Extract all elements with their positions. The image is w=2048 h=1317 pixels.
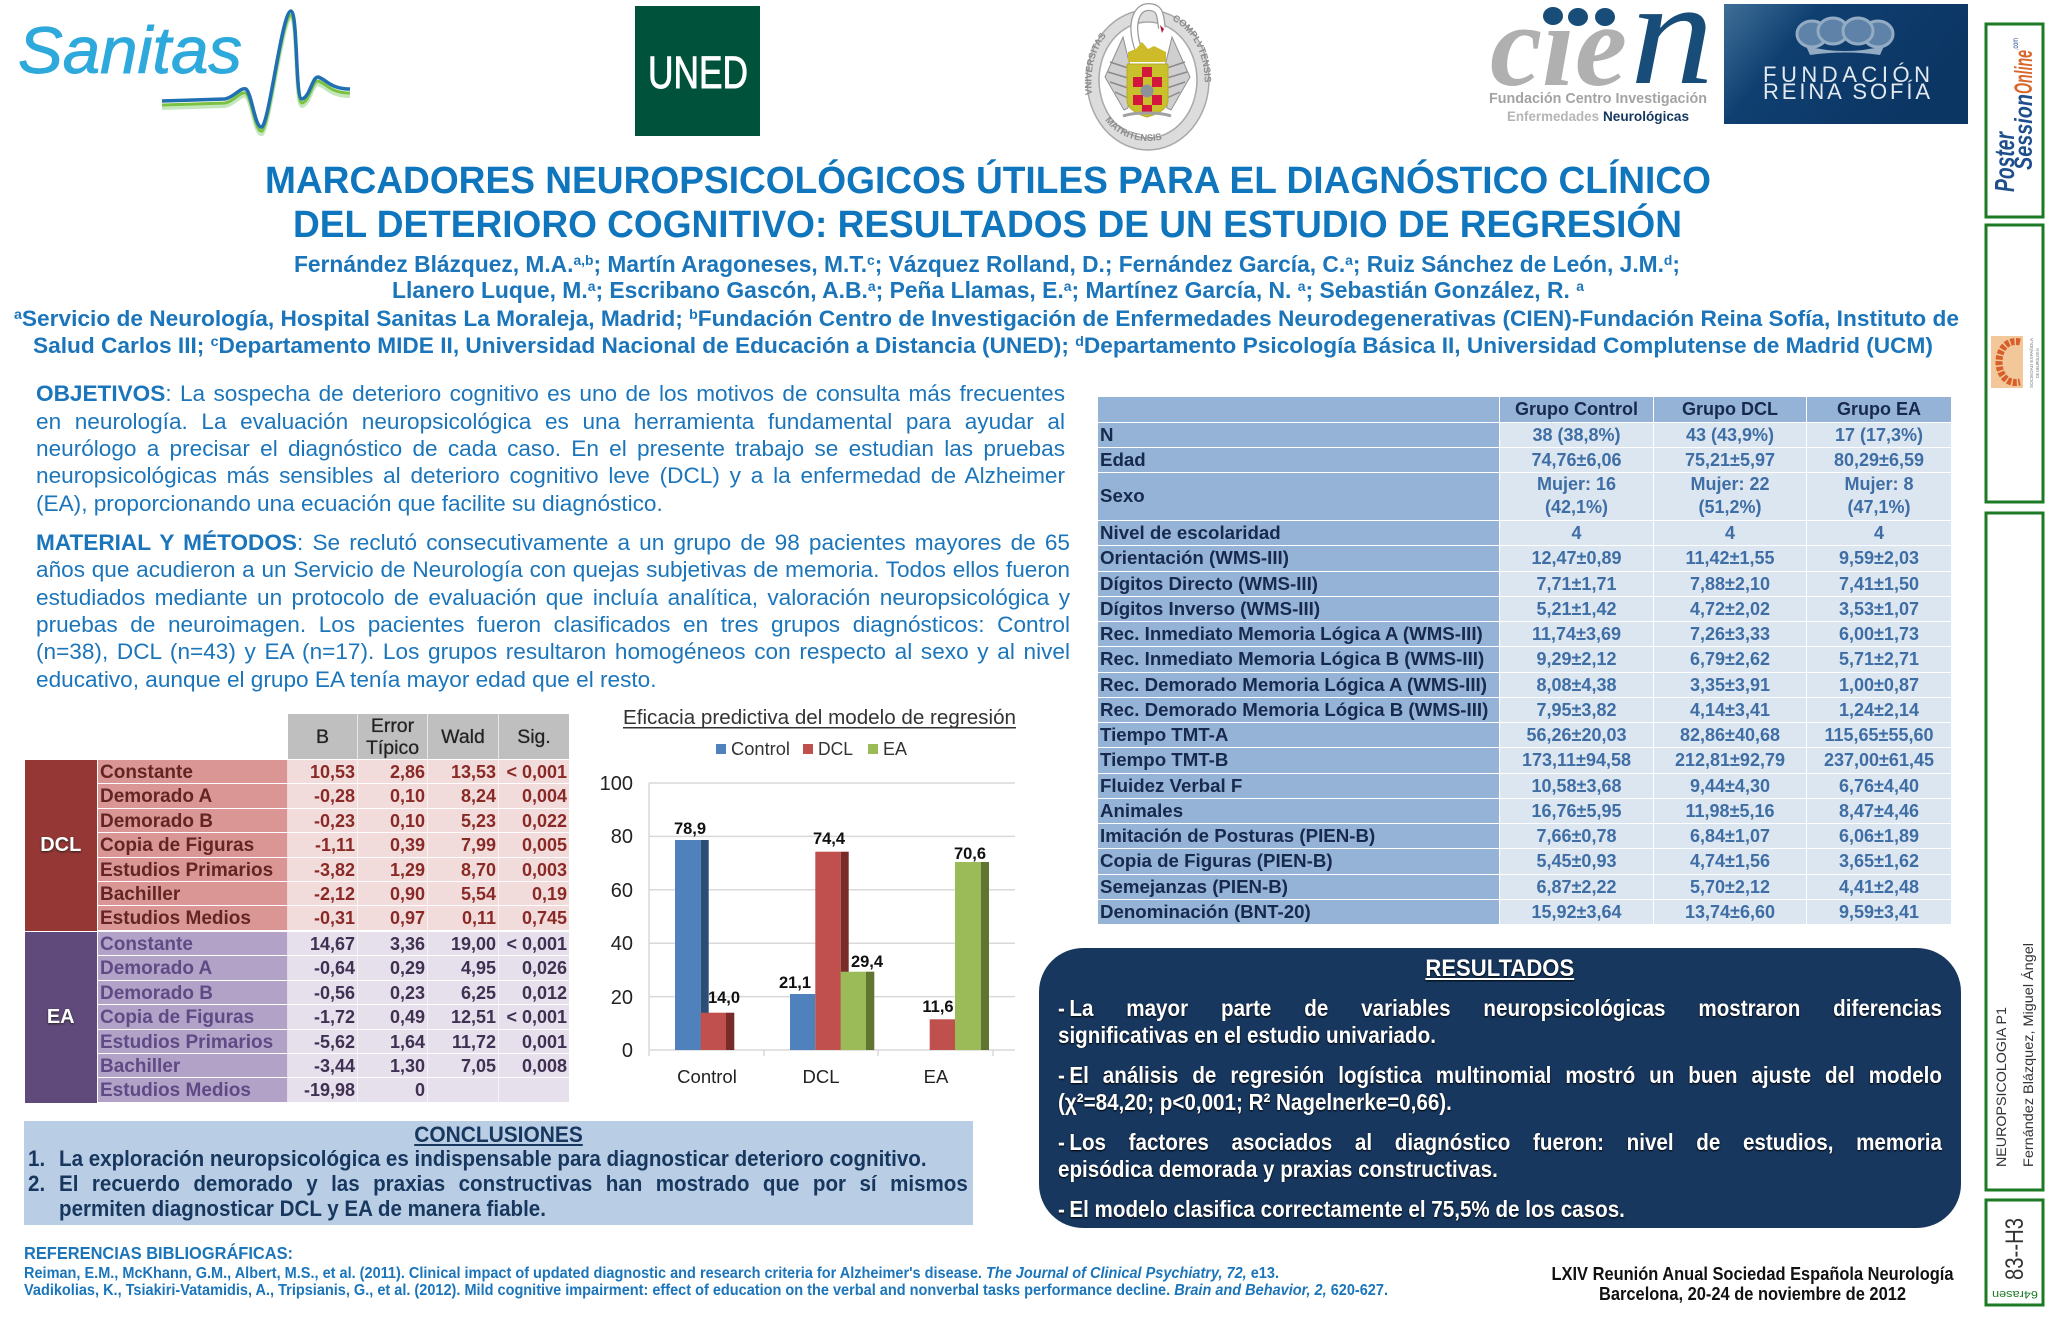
table: group descriptives: 7,88±2,10 <box>1690 574 1770 594</box>
table: group descriptives: 82,86±40,68 <box>1680 725 1780 745</box>
table header <box>288 714 569 759</box>
sidebar: poster area and author: Fernández Blázquez, Miguel Ángel <box>2020 943 2036 1167</box>
panel: objetivos: neuropsicológicas más sensibles al deterioro cognitivo leve (DCL) y a la enfermedad de Alzheimer <box>36 463 1065 488</box>
table: group descriptives: 6,84±1,07 <box>1690 826 1770 846</box>
authors: a <box>588 278 596 294</box>
table: group descriptives: 43 (43,9%) <box>1686 425 1774 445</box>
table: group descriptives: 6,06±1,89 <box>1839 826 1919 846</box>
group: EA rows: Constante <box>100 934 193 955</box>
panel: objetivos: neurólogo a precisar el diagnóstico de cada caso. En el presente trabajo se estudian las pruebas <box>36 436 1065 461</box>
table: group descriptives: 56,26±20,03 <box>1527 725 1626 745</box>
table: group descriptives: (42,1%) <box>1545 497 1608 517</box>
sidebar: Sociedad Española de Neurología logo: SOCIEDAD ESPAÑOLA <box>2028 338 2034 388</box>
chart legend <box>716 739 907 759</box>
group: EA rows: 0,23 <box>390 983 425 1003</box>
table: group descriptives: 173,11±94,58 <box>1522 750 1631 770</box>
group: DCL rows: < 0,001 <box>506 762 567 782</box>
table: group descriptives: 7,66±0,78 <box>1537 826 1616 846</box>
table: group descriptives: 115,65±55,60 <box>1824 725 1933 745</box>
group: DCL rows: 0,11 <box>462 908 496 928</box>
table: group descriptives: 38 (38,8%) <box>1532 425 1621 445</box>
group: DCL rows: 0,90 <box>390 884 425 904</box>
group: DCL rows: 8,24 <box>461 786 496 806</box>
group: DCL rows: 5,23 <box>461 811 496 831</box>
bar chart: predictive efficacy <box>600 707 1016 1087</box>
y axis labels: 0 <box>622 1040 633 1062</box>
group: DCL rows: Copia de Figuras <box>100 835 254 856</box>
logo: Fundación Reina Sofía: FUNDACIÓN <box>1763 62 1930 87</box>
logo: UNED <box>635 6 760 136</box>
references <box>24 1242 1388 1299</box>
table: group descriptives: 7,71±1,71 <box>1537 574 1616 594</box>
affiliations: Fundación Centro de Investigación de Enfermedades Neurodegenerativas (CIEN)-Fundación Reina Sofía, Instituto de <box>698 306 1959 331</box>
sidebar: PosterSessionOnline logo <box>1986 24 2043 217</box>
table: group descriptives: 3,65±1,62 <box>1839 851 1919 871</box>
table: group descriptives <box>1098 397 1951 924</box>
group: EA rows: Estudios Primarios <box>100 1032 273 1053</box>
affiliations <box>14 306 1959 358</box>
table: group descriptives: 4 <box>1725 523 1735 543</box>
y axis labels: 20 <box>611 987 633 1009</box>
group: DCL rows: 0,97 <box>390 908 425 928</box>
table: group descriptives: Nivel de escolaridad <box>1100 522 1281 543</box>
authors: ; Sebastián González, R. <box>1306 277 1576 303</box>
table: group descriptives: 4,41±2,48 <box>1839 877 1919 897</box>
authors <box>294 251 1680 303</box>
panel: resultados: -El análisis de regresión logística multinomial mostró un buen ajuste del modelo <box>1058 1062 1942 1088</box>
title <box>265 158 1711 246</box>
y axis labels: 100 <box>600 773 633 795</box>
panel: material y métodos: años que acudieron a un Servicio de Neurología con quejas subjetivas de memoria. Todos ellos fueron <box>36 557 1070 582</box>
group: DCL rows: 1,29 <box>390 860 425 880</box>
logo: Universidad Complutense seal <box>1084 3 1212 151</box>
authors: a <box>1298 278 1306 294</box>
y axis labels: 80 <box>611 826 633 848</box>
table: group descriptives: 237,00±61,45 <box>1824 750 1934 770</box>
group: EA rows: EA <box>47 1006 75 1028</box>
bars: EA group <box>930 862 989 1050</box>
authors: ; Escribano Gascón, A.B. <box>595 277 868 303</box>
authors: ; Martínez García, N. <box>1072 277 1298 303</box>
chart legend: DCL <box>818 739 853 759</box>
group: DCL rows: Estudios Primarios <box>100 860 273 881</box>
data labels: 74,4 <box>813 830 846 848</box>
table: group descriptives: 7,95±3,82 <box>1537 700 1616 720</box>
table: group descriptives: 5,70±2,12 <box>1690 877 1770 897</box>
sidebar: PosterSessionOnline logo: Online <box>2010 50 2038 94</box>
table: group descriptives: Dígitos Inverso (WMS-III) <box>1100 598 1320 619</box>
authors: a <box>1576 278 1584 294</box>
group: DCL rows: -0,31 <box>314 908 355 928</box>
table: group descriptives: 4,14±3,41 <box>1690 700 1770 720</box>
table: group descriptives: Sexo <box>1100 485 1145 506</box>
table: group descriptives: 80,29±6,59 <box>1834 450 1924 470</box>
group: DCL rows: -2,12 <box>314 884 355 904</box>
logo: Sanitas <box>18 11 350 134</box>
table: group descriptives: 4,72±2,02 <box>1690 599 1770 619</box>
table: group descriptives: 3,53±1,07 <box>1839 599 1919 619</box>
group: DCL rows: 13,53 <box>451 762 496 782</box>
group: EA rows: Demorado A <box>100 958 212 979</box>
authors: Fernández Blázquez, M.A. <box>294 251 576 277</box>
group: EA rows: 0,29 <box>390 958 425 978</box>
references: REFERENCIAS BIBLIOGRÁFICAS: <box>24 1242 293 1263</box>
group: DCL rows: 0,003 <box>522 860 567 880</box>
authors: d <box>1664 252 1672 268</box>
logo: UNED: UNED <box>648 47 748 98</box>
table header <box>1098 397 1951 423</box>
group: EA rows: 14,67 <box>310 934 355 954</box>
group: EA rows: < 0,001 <box>506 1007 567 1027</box>
table: group descriptives: 11,98±5,16 <box>1686 801 1774 821</box>
table: group descriptives: 9,44±4,30 <box>1690 776 1770 796</box>
table: group descriptives: 15,92±3,64 <box>1532 902 1621 922</box>
chart legend: EA <box>883 739 907 759</box>
group: EA rows: Estudios Medios <box>100 1080 251 1101</box>
logo: Universidad Complutense seal: COMPLVTENSIS <box>1174 15 1212 82</box>
congress note: Barcelona, 20-24 de noviembre de 2012 <box>1599 1284 1906 1304</box>
y axis labels <box>600 773 633 1062</box>
y axis labels: 40 <box>611 933 633 955</box>
panel: conclusiones: El recuerdo demorado y las praxias constructivas han mostrado que por sí mismos <box>59 1171 968 1196</box>
title: DEL DETERIORO COGNITIVO: RESULTADOS DE UN ESTUDIO DE REGRESIÓN <box>293 202 1682 246</box>
group: DCL rows: 0,005 <box>522 835 567 855</box>
group: DCL rows: -0,28 <box>314 786 355 806</box>
authors: a <box>1064 278 1072 294</box>
references: Vadikolias, K., Tsiakiri-Vatamidis, A., Tripsianis, G., et al. (2012). Mild cognitive impairment: effect of education on the verbal and nonverbal tasks performance decline. Brain and Behavior, 2, 620-627. <box>24 1282 1388 1299</box>
logo: CIEN: Neurológicas <box>1603 108 1689 124</box>
panel: objetivos <box>36 381 1065 516</box>
logo: CIEN: Enfermedades <box>1507 108 1599 124</box>
group: EA rows: 1,64 <box>390 1032 425 1052</box>
bars: DCL group <box>790 852 874 1050</box>
logo: Universidad Complutense seal: MATRITENSIS <box>1105 116 1162 141</box>
panel: objetivos: en neurología. La evaluación neuropsicológica es una herramienta fundamental para ayudar al <box>36 409 1065 434</box>
group: DCL rows: DCL <box>40 834 81 856</box>
data labels <box>674 820 986 1016</box>
affiliations: Salud Carlos III; <box>33 333 203 358</box>
table: group descriptives: 212,81±92,79 <box>1675 750 1785 770</box>
table: group descriptives: 4 <box>1571 523 1582 543</box>
table: group descriptives: 13,74±6,60 <box>1685 902 1775 922</box>
table header: Sig. <box>517 726 551 748</box>
panel: resultados: significativas en el estudio univariado. <box>1058 1022 1436 1048</box>
group: DCL rows: -3,82 <box>314 860 355 880</box>
group: DCL rows: Bachiller <box>100 884 180 905</box>
panel: material y métodos: educativo, aunque el grupo EA tenía mayor edad que el resto. <box>36 667 657 692</box>
data labels: 11,6 <box>922 998 954 1016</box>
authors: ; Vázquez Rolland, D.; Fernández García, C. <box>875 251 1345 277</box>
table: group descriptives: 16,76±5,95 <box>1532 801 1621 821</box>
affiliations: Servicio de Neurología, Hospital Sanitas La Moraleja, Madrid; <box>22 306 689 331</box>
affiliations: a <box>14 306 22 322</box>
table: group descriptives: 1,24±2,14 <box>1839 700 1919 720</box>
table header: B <box>316 726 329 748</box>
table: group descriptives: 12,47±0,89 <box>1532 548 1621 568</box>
chart legend: Control <box>731 739 790 759</box>
group: DCL rows: 10,53 <box>310 762 355 782</box>
panel: material y métodos: estudiados mediante un protocolo de evaluación que incluía analítica, valoración neuropsicológica y <box>36 585 1070 610</box>
bars: Control group <box>675 840 734 1050</box>
sidebar: poster code: 83--H3 <box>2001 1218 2029 1280</box>
group: DCL rows <box>25 760 569 931</box>
group: DCL rows: 0,022 <box>522 811 567 831</box>
logo: Universidad Complutense seal: VNIVERSITAS <box>1084 32 1106 96</box>
panel: resultados: (χ²=84,20; p<0,001; R² Nagelnerke=0,66). <box>1058 1089 1452 1115</box>
panel: objetivos: OBJETIVOS: La sospecha de deterioro cognitivo es uno de los motivos de consulta más frecuentes <box>36 381 1065 406</box>
group: EA rows: < 0,001 <box>506 934 567 954</box>
table: group descriptives: Edad <box>1100 449 1146 470</box>
group: EA rows: 0,49 <box>390 1007 425 1027</box>
table: group descriptives: 7,26±3,33 <box>1690 624 1770 644</box>
group: EA rows: -0,56 <box>314 983 355 1003</box>
authors: Llanero Luque, M. <box>392 277 589 303</box>
group: DCL rows: 0,19 <box>532 884 567 904</box>
panel: resultados: -Los factores asociados al diagnóstico fueron: nivel de estudios, memoria <box>1058 1129 1942 1155</box>
group: DCL rows: 2,86 <box>390 762 425 782</box>
table: group descriptives: Rec. Inmediato Memoria Lógica A (WMS-III) <box>1100 623 1483 644</box>
group: DCL rows: 0,39 <box>390 835 425 855</box>
group: EA rows: 4,95 <box>461 958 496 978</box>
logo: Fundación Reina Sofía: REINA SOFÍA <box>1763 79 1930 104</box>
group: DCL rows: 8,70 <box>461 860 496 880</box>
group: EA rows: 7,05 <box>461 1056 496 1076</box>
table: group descriptives: Rec. Demorado Memoria Lógica A (WMS-III) <box>1100 674 1487 695</box>
group: EA rows: 0 <box>415 1080 425 1100</box>
table: group descriptives: 5,71±2,71 <box>1839 649 1919 669</box>
authors: c <box>867 252 875 268</box>
panel: resultados: -La mayor parte de variables neuropsicológicas mostraron diferencias <box>1058 995 1942 1021</box>
affiliations: c <box>211 333 219 349</box>
group: EA rows: 0,001 <box>522 1032 567 1052</box>
table: group descriptives: 3,35±3,91 <box>1690 675 1770 695</box>
table: group descriptives: 75,21±5,97 <box>1685 450 1775 470</box>
table: group descriptives: 11,74±3,69 <box>1532 624 1621 644</box>
group: DCL rows: 0,745 <box>522 908 567 928</box>
table: group descriptives: Imitación de Posturas (PIEN-B) <box>1100 825 1375 846</box>
table: group descriptives: (51,2%) <box>1698 497 1762 517</box>
group: DCL rows: 0,10 <box>390 811 425 831</box>
table: group descriptives: 11,42±1,55 <box>1686 548 1774 568</box>
table: group descriptives: Copia de Figuras (PIEN-B) <box>1100 850 1333 871</box>
authors: ; Peña Llamas, E. <box>876 277 1064 303</box>
table: group descriptives: 9,59±3,41 <box>1839 902 1919 922</box>
x axis labels <box>677 1066 949 1087</box>
group: DCL rows: Estudios Medios <box>100 908 251 929</box>
group: DCL rows: -0,23 <box>314 811 355 831</box>
x axis labels: Control <box>677 1066 737 1087</box>
panel: resultados: episódica demorada y praxias constructivas. <box>1058 1156 1498 1182</box>
table: group descriptives: 7,41±1,50 <box>1839 574 1919 594</box>
panel: conclusiones: 2. <box>28 1171 45 1196</box>
x axis labels: DCL <box>802 1066 840 1087</box>
table: group descriptives: Rec. Inmediato Memoria Lógica B (WMS-III) <box>1100 648 1484 669</box>
authors: ; Martín Aragoneses, M.T. <box>593 251 867 277</box>
group: EA rows: 0,012 <box>522 983 567 1003</box>
table header: Grupo DCL <box>1682 399 1778 419</box>
table: group descriptives: 4 <box>1874 523 1884 543</box>
panel: conclusiones: La exploración neuropsicológica es indispensable para diagnosticar deterioro cognitivo. <box>59 1146 927 1171</box>
panel: resultados <box>1039 948 1961 1228</box>
group: DCL rows: 0,004 <box>522 786 567 806</box>
panel: material y métodos: (n=38), DCL (n=43) y EA (n=17). Los grupos resultaron homogéneos con respecto al sexo y al nivel <box>36 639 1070 664</box>
group: EA rows: -1,72 <box>314 1007 355 1027</box>
table header: Wald <box>441 726 485 748</box>
table: group descriptives: Tiempo TMT-A <box>1100 724 1228 745</box>
table: group descriptives: 5,45±0,93 <box>1537 851 1616 871</box>
affiliations: d <box>1075 333 1084 349</box>
table: group descriptives: 10,58±3,68 <box>1532 776 1621 796</box>
table: group descriptives: 9,59±2,03 <box>1839 548 1919 568</box>
group: EA rows: 6,25 <box>461 983 496 1003</box>
group: EA rows: -3,44 <box>314 1056 355 1076</box>
authors: ; Ruiz Sánchez de León, J.M. <box>1353 251 1664 277</box>
table: group descriptives: 4,74±1,56 <box>1690 851 1770 871</box>
panel: resultados: -El modelo clasifica correctamente el 75,5% de los casos. <box>1058 1196 1625 1222</box>
table: group descriptives: Dígitos Directo (WMS-III) <box>1100 573 1318 594</box>
panel: conclusiones <box>24 1121 973 1225</box>
affiliations: Departamento Psicología Básica II, Universidad Complutense de Madrid (UCM) <box>1084 333 1933 358</box>
table: regression coefficients <box>25 714 569 1103</box>
group: DCL rows: Constante <box>100 762 193 783</box>
conclusions heading: CONCLUSIONES <box>414 1122 583 1147</box>
group: EA rows: 11,72 <box>452 1032 496 1052</box>
table: group descriptives: Mujer: 22 <box>1690 474 1770 494</box>
table: group descriptives: Mujer: 16 <box>1537 474 1616 494</box>
table: group descriptives: 6,87±2,22 <box>1537 877 1616 897</box>
table header: Grupo EA <box>1837 399 1921 419</box>
group: EA rows: 1,30 <box>390 1056 425 1076</box>
table: group descriptives: 6,76±4,40 <box>1839 776 1919 796</box>
sidebar: Sociedad Española de Neurología logo: DE NEUROLOGÍA <box>2034 348 2040 378</box>
sidebar: poster code <box>1986 1200 2043 1305</box>
data labels: 21,1 <box>779 974 811 992</box>
sidebar: Sociedad Española de Neurología logo <box>1986 225 2043 502</box>
panel: conclusiones: permiten diagnosticar DCL y EA de manera fiable. <box>59 1196 546 1221</box>
group: EA rows: Copia de Figuras <box>100 1007 254 1028</box>
table: group descriptives: Animales <box>1100 800 1183 821</box>
authors: a,b <box>573 252 593 268</box>
group: DCL rows: Demorado B <box>100 811 213 832</box>
congress note <box>1552 1264 1954 1304</box>
table: group descriptives: 6,00±1,73 <box>1839 624 1919 644</box>
panel: objetivos: (EA), proporcionando una ecuación que facilite su diagnóstico. <box>36 491 663 516</box>
sidebar: PosterSessionOnline logo: .com <box>2011 38 2020 50</box>
sidebar: PosterSessionOnline logo: Poster <box>1989 131 2020 192</box>
table: group descriptives: 1,00±0,87 <box>1839 675 1919 695</box>
sidebar: poster code: 64rasen <box>1992 1288 2038 1300</box>
group: DCL rows: 7,99 <box>461 835 496 855</box>
logo: CIEN <box>1489 0 1714 124</box>
group: EA rows: -19,98 <box>304 1080 355 1100</box>
table header: Error <box>371 714 414 736</box>
table header: Típico <box>366 736 419 758</box>
table: group descriptives: 5,21±1,42 <box>1537 599 1616 619</box>
table: group descriptives: 74,76±6,06 <box>1532 450 1621 470</box>
group: DCL rows: Demorado A <box>100 786 212 807</box>
table: group descriptives: 17 (17,3%) <box>1835 425 1923 445</box>
x axis labels: EA <box>924 1066 949 1087</box>
group: EA rows: 12,51 <box>451 1007 496 1027</box>
group: EA rows: Demorado B <box>100 983 213 1004</box>
panel: conclusiones: 1. <box>28 1146 45 1171</box>
authors: a <box>868 278 876 294</box>
panel: material y métodos: pruebas de neuroimagen. Los pacientes fueron clasificados en tres grupos diagnósticos: Control <box>36 612 1070 637</box>
logo: CIEN: Fundación Centro Investigación <box>1489 90 1707 107</box>
table: group descriptives: 8,47±4,46 <box>1839 801 1919 821</box>
panel: material y métodos <box>36 530 1070 692</box>
authors: ; <box>1672 251 1680 277</box>
group: EA rows: -5,62 <box>314 1032 355 1052</box>
affiliations: Departamento MIDE II, Universidad Nacional de Educación a Distancia (UNED); <box>219 333 1075 358</box>
panel: material y métodos: MATERIAL Y MÉTODOS: Se reclutó consecutivamente a un grupo de 98 pacientes mayores de 65 <box>36 530 1070 555</box>
group: DCL rows: 5,54 <box>461 884 496 904</box>
table: group descriptives: 9,29±2,12 <box>1537 649 1616 669</box>
title: MARCADORES NEUROPSICOLÓGICOS ÚTILES PARA EL DIAGNÓSTICO CLÍNICO <box>265 158 1711 202</box>
table: group descriptives: 8,08±4,38 <box>1537 675 1616 695</box>
congress note: LXIV Reunión Anual Sociedad Española Neurología <box>1552 1264 1954 1284</box>
authors: a <box>1345 252 1353 268</box>
data labels: 14,0 <box>708 989 740 1007</box>
logo: Fundación Reina Sofía <box>1724 4 1968 124</box>
group: DCL rows: 0,10 <box>390 786 425 806</box>
data labels: 78,9 <box>674 820 706 838</box>
affiliations: b <box>689 306 698 322</box>
table: group descriptives: Fluidez Verbal F <box>1100 775 1242 796</box>
group: EA rows: 19,00 <box>451 934 496 954</box>
table: group descriptives: Semejanzas (PIEN-B) <box>1100 876 1288 897</box>
table: group descriptives: Mujer: 8 <box>1844 474 1914 494</box>
group: EA rows: 0,026 <box>522 958 567 978</box>
sidebar: poster area and author <box>1986 513 2043 1190</box>
table header: Grupo Control <box>1515 399 1638 419</box>
chart title: Eficacia predictiva del modelo de regresión <box>623 707 1016 729</box>
group: EA rows: -0,64 <box>314 958 355 978</box>
data labels: 70,6 <box>954 845 986 863</box>
y axis labels: 60 <box>611 880 633 902</box>
sidebar: PosterSessionOnline logo: Session <box>2010 94 2038 170</box>
group: EA rows: 0,008 <box>522 1056 567 1076</box>
table: group descriptives: Rec. Demorado Memoria Lógica B (WMS-III) <box>1100 699 1488 720</box>
sidebar: poster area and author: NEUROPSICOLOGIA P1 <box>1993 1007 2009 1167</box>
table: group descriptives: (47,1%) <box>1847 497 1911 517</box>
references: Reiman, E.M., McKhann, G.M., Albert, M.S., et al. (2011). Clinical impact of updated diagnostic and research criteria for Alzheimer's disease. The Journal of Clinical Psychiatry, 72, e13. <box>24 1265 1279 1282</box>
group: EA rows <box>25 932 569 1103</box>
table: group descriptives: Tiempo TMT-B <box>1100 749 1228 770</box>
table: group descriptives: 6,79±2,62 <box>1690 649 1770 669</box>
table: group descriptives: Orientación (WMS-III) <box>1100 547 1289 568</box>
table: group descriptives: N <box>1100 424 1114 445</box>
data labels: 29,4 <box>851 953 884 971</box>
group: EA rows: Bachiller <box>100 1056 180 1077</box>
group: DCL rows: -1,11 <box>315 835 355 855</box>
group: EA rows: 3,36 <box>390 934 425 954</box>
logo: Sanitas: Sanitas <box>18 13 242 87</box>
table: group descriptives: Denominación (BNT-20) <box>1100 901 1311 922</box>
